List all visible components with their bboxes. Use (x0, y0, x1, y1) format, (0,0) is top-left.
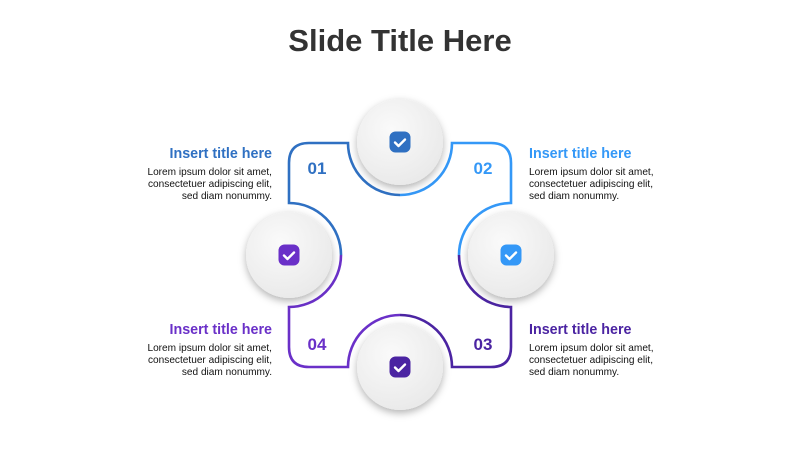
text block 01: Insert title here (170, 146, 272, 162)
circle right (468, 212, 554, 298)
text block 04: consectetuer adipiscing elit, (148, 355, 272, 366)
number 04: 04 (308, 335, 327, 354)
text block 02: consectetuer adipiscing elit, (529, 179, 653, 190)
connector segment 04 (289, 255, 400, 367)
text block 02: Lorem ipsum dolor sit amet, (529, 167, 654, 178)
text block 01: consectetuer adipiscing elit, (148, 179, 272, 190)
text block 03 (529, 322, 654, 378)
circle bottom (357, 324, 443, 410)
connector segment 03 (400, 255, 511, 367)
connector segment 02 (400, 143, 511, 255)
text block 04 (147, 322, 272, 378)
text block 03: Insert title here (529, 322, 632, 338)
text block 04: Insert title here (170, 322, 272, 338)
text block 02: sed diam nonummy. (529, 191, 619, 202)
text block 02 (529, 146, 654, 202)
text block 01: sed diam nonummy. (182, 191, 272, 202)
text block 02: Insert title here (529, 146, 632, 162)
text block 01: Lorem ipsum dolor sit amet, (147, 167, 272, 178)
number 01: 01 (308, 159, 326, 178)
connector segment 01 (289, 143, 400, 255)
number 02: 02 (474, 159, 492, 178)
circle left (246, 212, 332, 298)
text block 04: sed diam nonummy. (182, 367, 272, 378)
title: Slide Title Here (288, 23, 512, 58)
text block 03: Lorem ipsum dolor sit amet, (529, 343, 654, 354)
text block 03: sed diam nonummy. (529, 367, 619, 378)
text block 04: Lorem ipsum dolor sit amet, (147, 343, 272, 354)
number 03: 03 (474, 335, 492, 354)
text block 01 (147, 146, 272, 202)
text block 03: consectetuer adipiscing elit, (529, 355, 653, 366)
circle top (357, 99, 443, 185)
